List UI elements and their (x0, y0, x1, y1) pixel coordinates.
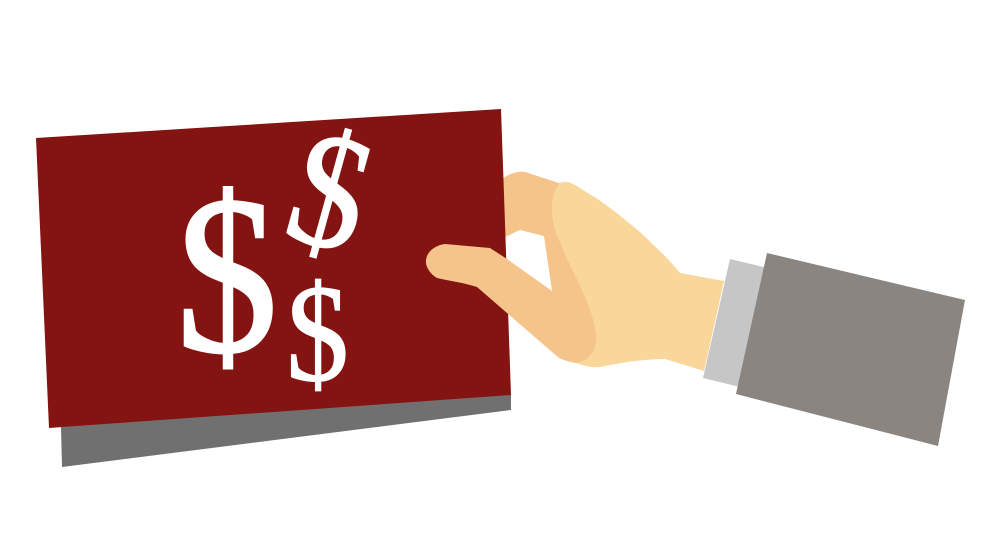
suit sleeve (736, 253, 965, 446)
index finger and palm shadow (426, 225, 610, 363)
finger behind card (500, 172, 570, 240)
slanted dollar sign: $ (270, 93, 391, 289)
wrist and palm (552, 182, 724, 371)
card shadow (61, 394, 511, 467)
sleeve cuff (703, 259, 768, 387)
hand (426, 182, 724, 371)
card (36, 109, 511, 428)
small dollar sign: $ (286, 256, 349, 410)
large dollar sign: $ (176, 149, 278, 400)
